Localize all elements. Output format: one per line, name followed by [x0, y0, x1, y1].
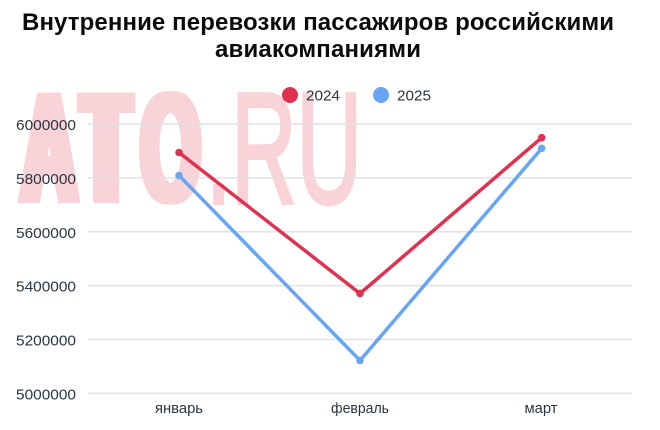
title: авиакомпаниями [215, 36, 421, 63]
title [22, 9, 614, 63]
watermark: ATO.RU: A [22, 62, 76, 236]
line series 2024 [175, 134, 545, 297]
y axis labels: 5800000 [16, 171, 76, 188]
y axis labels: 6000000 [16, 117, 76, 134]
watermark: ATO.RU: T [84, 62, 128, 236]
watermark: ATO.RU: A [26, 62, 82, 236]
y axis labels: 5000000 [16, 386, 76, 404]
watermark: ATO.RU: T [90, 62, 136, 236]
watermark: ATO.RU: O [140, 62, 200, 236]
watermark: ATO.RU: O [144, 62, 204, 236]
watermark: ATO.RU: T [76, 62, 122, 236]
legend: 2025 [397, 88, 431, 104]
y axis labels: 5600000 [16, 225, 76, 242]
watermark: ATO.RU: .RU [206, 61, 362, 237]
y axis grid lines [88, 124, 632, 393]
y axis labels: 5200000 [16, 333, 76, 350]
x axis labels: январь [155, 400, 203, 417]
x axis labels: март [524, 400, 558, 417]
title: Внутренние перевозки пассажиров российскими [22, 9, 614, 36]
legend: 2024 [306, 88, 340, 104]
line series 2025 [175, 144, 545, 364]
x axis labels [155, 400, 558, 417]
y axis labels [16, 117, 76, 404]
y axis labels: 5400000 [16, 279, 76, 296]
watermark: ATO.RU: O [136, 62, 196, 236]
watermark: ATO.RU [16, 61, 362, 237]
watermark: ATO.RU: A [16, 62, 72, 236]
x axis labels: февраль [331, 400, 389, 417]
legend [282, 87, 431, 104]
